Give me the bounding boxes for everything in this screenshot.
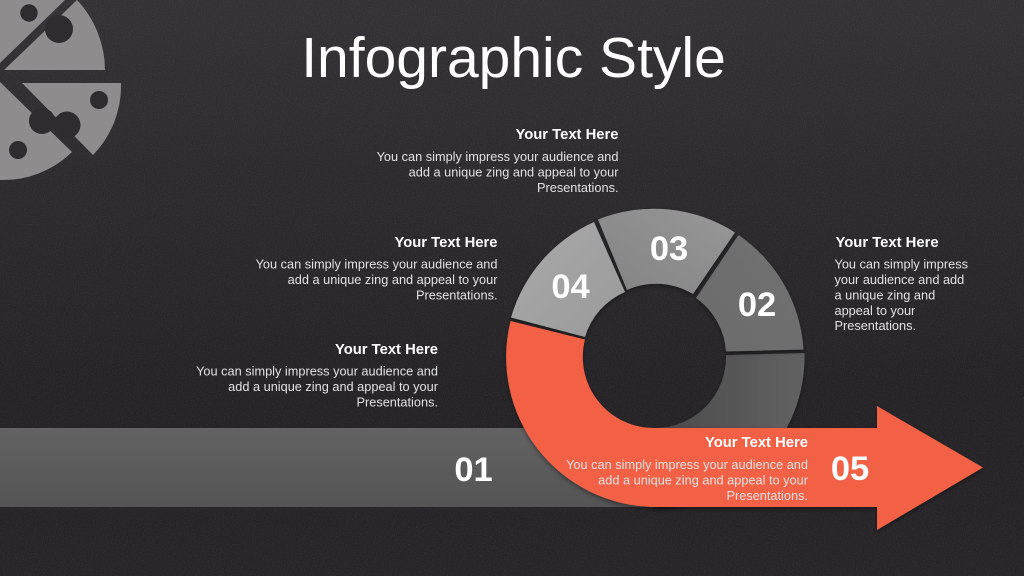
text block: item 05: Presentations. <box>726 488 808 503</box>
text block: item 01: Presentations. <box>356 394 438 410</box>
text block: item 03: You can simply impress your audience and <box>377 149 618 164</box>
text block: item 03: Your Text Here <box>515 127 618 143</box>
title: Infographic Style <box>301 26 726 90</box>
text block: item 02: appeal to your <box>834 303 916 318</box>
chart: donut segment 04 <box>511 222 625 337</box>
chart: donut segment 03 <box>598 209 735 294</box>
text block: item 04: add a unique zing and appeal to your <box>288 272 498 287</box>
text block: item 01: add a unique zing and appeal to your <box>228 379 439 394</box>
text block: item 03: Presentations. <box>537 180 618 195</box>
icon: pizza slices <box>0 0 121 180</box>
text block: item 02: your audience and add <box>834 272 964 287</box>
text block: item 02: a unique zing and <box>834 288 935 302</box>
text block: item 03: add a unique zing and appeal to your <box>409 164 619 180</box>
number 03: 03 <box>650 230 688 268</box>
text block: item 05 <box>566 435 809 503</box>
text block: item 04: Presentations. <box>416 288 498 302</box>
text block: item 04: You can simply impress your audience and <box>256 256 498 272</box>
number 02: 02 <box>738 286 776 324</box>
text block: item 02: You can simply impress <box>834 256 968 272</box>
arrow: orange arrow <box>655 406 983 530</box>
patch: orange seam <box>649 428 661 507</box>
text block: item 05: add a unique zing and appeal to your <box>598 472 809 488</box>
text block: item 01: You can simply impress your audience and <box>196 364 438 378</box>
text block: item 05: You can simply impress your audience and <box>566 457 808 472</box>
band: gray arrow tail <box>0 428 655 507</box>
chart: donut segment orange <box>506 321 655 507</box>
text block: item 02: Your Text Here <box>836 235 939 251</box>
number 04: 04 <box>551 268 590 306</box>
text block: item 02: Presentations. <box>834 318 916 333</box>
number 05: 05 <box>831 450 869 488</box>
number 01: 01 <box>454 451 493 489</box>
text block: item 02 <box>834 235 968 333</box>
text block: item 05: Your Text Here <box>705 435 808 451</box>
text block: item 04: Your Text Here <box>394 235 498 251</box>
text block: item 01: Your Text Here <box>335 342 438 358</box>
chart: donut segment dark gray <box>655 353 805 507</box>
text block: item 01 <box>196 342 439 410</box>
text block: item 04 <box>256 235 498 302</box>
text block: item 03 <box>377 127 619 195</box>
chart: donut segment 02 <box>696 235 804 352</box>
